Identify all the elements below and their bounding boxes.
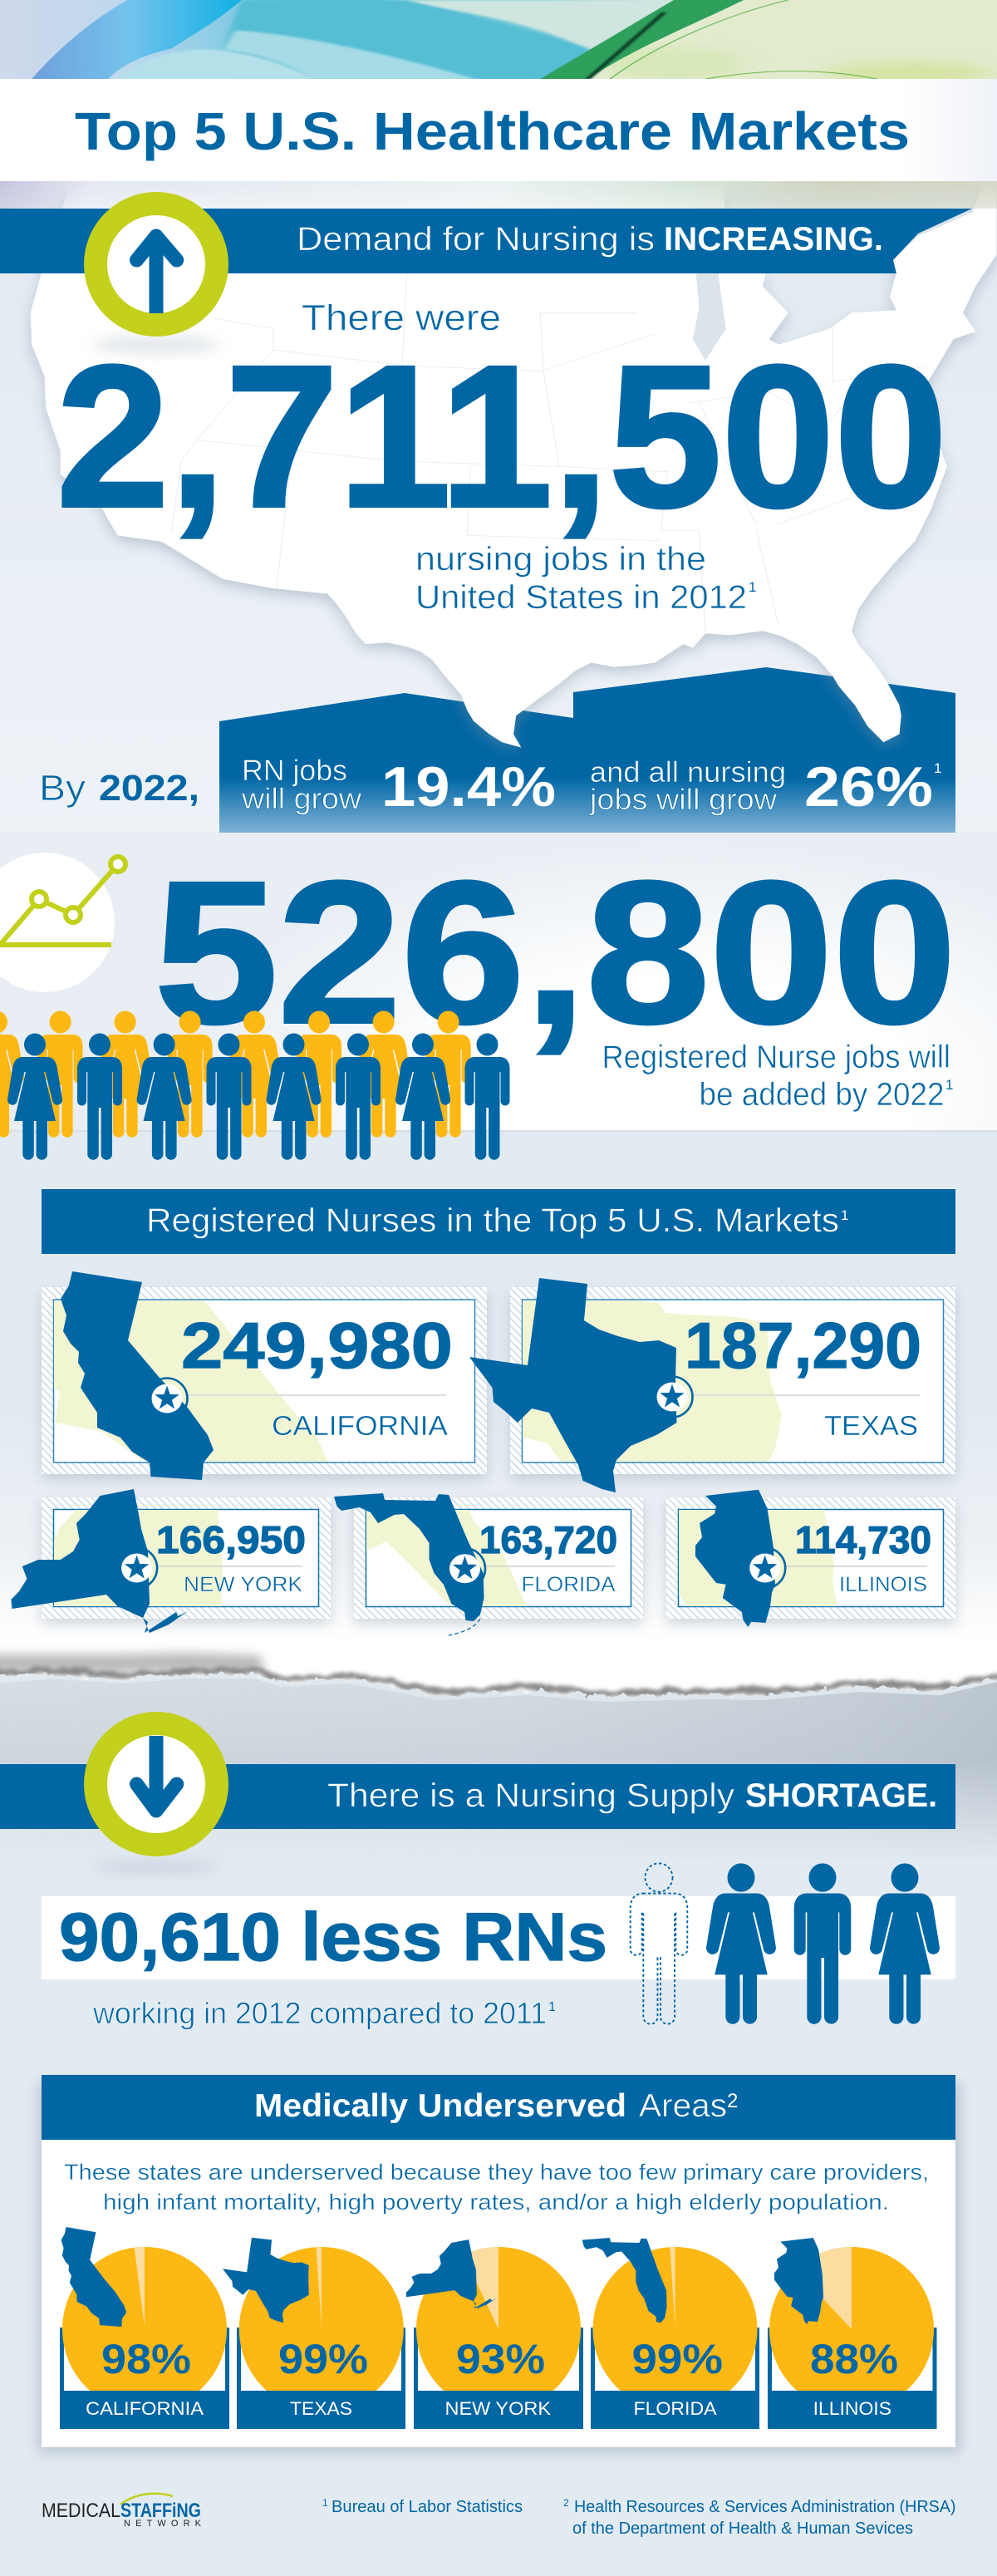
pie: California 98%: CALIFORNIA <box>86 2398 204 2419</box>
pie: New York 93%: 93% <box>456 2336 545 2382</box>
panel: New York <box>11 1489 331 1633</box>
pie: Illinois 88%: ILLINOIS <box>813 2398 891 2419</box>
decorative wave banner <box>0 0 997 86</box>
big stat: 2,711,500: 2,711,500 <box>56 324 947 549</box>
state: California <box>61 1271 214 1480</box>
heading: demand increasing: Demand for Nursing is <box>297 221 655 258</box>
state name: ILLINOIS <box>839 1573 927 1596</box>
big stat: 526,800: 526,800 <box>155 840 956 1065</box>
star badge <box>651 1376 693 1418</box>
text: by 2022: By <box>39 768 86 809</box>
panel header <box>42 2075 955 2140</box>
icon: up arrow badge <box>91 204 221 355</box>
text: by 2022: 2022, <box>99 768 199 809</box>
description <box>64 2160 929 2215</box>
value: 163,720 <box>479 1518 617 1561</box>
panel: California <box>42 1271 487 1480</box>
reflection below title band <box>0 181 997 209</box>
text: nursing jobs in the United States: 1 <box>749 579 756 595</box>
text: all nursing jobs will grow 26% <box>589 755 941 819</box>
value: 166,950 <box>156 1518 306 1561</box>
text: nursing jobs in the United States: United States in 2012 <box>415 579 747 616</box>
text: RN jobs will grow 19.4%: 19.4% <box>381 755 556 819</box>
heading band: registered nurses in top 5 markets <box>42 1189 955 1254</box>
value: 187,290 <box>685 1309 921 1382</box>
text: by 2022 <box>39 768 199 809</box>
heading: demand increasing <box>297 221 883 258</box>
text: nursing jobs in the United States: nursing jobs in the <box>415 541 706 578</box>
logo: Medical Staffing Network: MEDICAL <box>42 2500 120 2522</box>
description: These states are underserved because they have too few primary care providers, <box>64 2160 929 2185</box>
white strip: 90,610 less RNs <box>42 1896 955 1979</box>
panel: medically underserved areas <box>38 2075 960 2453</box>
figure: missing nurse outline <box>631 1863 687 2024</box>
pie: Illinois 88%: 88% <box>810 2336 898 2382</box>
growth box: all nursing jobs <box>573 667 955 833</box>
star badge <box>744 1547 785 1589</box>
logo: Medical Staffing Network: NETWORK <box>124 2519 202 2529</box>
title: Top 5 U.S. Healthcare Markets <box>75 101 910 161</box>
pie: New York 93% <box>406 2239 583 2429</box>
footnote: Bureau of Labor Statistics: 1 <box>322 2497 328 2509</box>
star badge <box>444 1548 485 1589</box>
figures: remaining nurses <box>706 1863 940 2024</box>
text: RN jobs added by 2022: be added by 2022 <box>700 1077 944 1113</box>
logo: Medical Staffing Network: STAFFiNG <box>120 2500 201 2522</box>
text: RN jobs added by 2022: 1 <box>945 1077 953 1093</box>
text: all nursing jobs will grow 26%: 26% <box>804 755 933 819</box>
text: RN jobs will grow 19.4%: RN jobs <box>242 755 347 787</box>
map: United States outline <box>31 151 997 753</box>
panel: Texas <box>469 1278 955 1492</box>
pie: California 98% <box>60 2227 229 2429</box>
value: 249,980 <box>181 1309 453 1382</box>
heading: shortage: There is a Nursing Supply <box>327 1777 734 1814</box>
title band <box>0 79 997 181</box>
star badge <box>116 1547 157 1589</box>
heading: demand increasing: INCREASING. <box>664 221 883 258</box>
text: all nursing jobs will grow 26%: and all nursing <box>590 756 786 789</box>
panel header: 2 <box>727 2090 738 2112</box>
heading band: registered nurses in top 5 markets: Registered Nurses in the Top 5 U.S. Markets <box>146 1202 839 1239</box>
description: high infant mortality, high poverty rates, and/or a high elderly population. <box>103 2190 889 2215</box>
people row: yellow figures <box>0 1010 471 1138</box>
value: 114,730 <box>795 1518 931 1561</box>
text: RN jobs will grow 19.4% <box>241 755 556 819</box>
text: all nursing jobs will grow 26%: 1 <box>934 760 941 776</box>
heading: shortage <box>327 1777 937 1814</box>
state: Texas <box>469 1278 676 1492</box>
torn paper divider <box>0 1662 997 1870</box>
state name: NEW YORK <box>184 1573 302 1596</box>
footnote: HRSA: of the Department of Health & Human Sevices <box>572 2519 913 2538</box>
text: working in 2012 compared to 2011: 1 <box>548 2000 556 2014</box>
header band: supply shortage <box>0 1764 955 1829</box>
state: Illinois <box>695 1490 775 1627</box>
star badge <box>146 1378 188 1419</box>
state name: TEXAS <box>824 1410 918 1441</box>
white strip: 90,610 less RNs: 90,610 less RNs <box>59 1900 607 1975</box>
text: RN jobs will grow 19.4%: will grow <box>241 783 362 815</box>
text: nursing jobs in the United States <box>415 541 756 616</box>
panel header: Medically Underserved <box>254 2088 626 2124</box>
panel: Illinois <box>666 1490 955 1627</box>
logo: Medical Staffing Network <box>42 2494 202 2529</box>
footnote: HRSA <box>563 2497 955 2538</box>
text: RN jobs added by 2022 <box>602 1040 953 1113</box>
pie: California 98%: 98% <box>101 2336 191 2382</box>
text: working in 2012 compared to 2011: working in 2012 compared to 2011 <box>92 1996 547 2030</box>
header band: demand for nursing <box>0 209 972 273</box>
state: New York <box>11 1489 188 1633</box>
heading: shortage: SHORTAGE. <box>745 1777 937 1814</box>
pie: New York 93%: NEW YORK <box>445 2398 551 2419</box>
pie: Florida 99% <box>582 2238 759 2429</box>
text: there were: There were <box>302 297 501 338</box>
panel: Florida <box>334 1493 643 1635</box>
growth box: RN jobs <box>219 693 573 833</box>
icon: growth line chart <box>0 853 125 992</box>
text: RN jobs added by 2022: Registered Nurse jobs will <box>602 1040 950 1075</box>
icon: down arrow badge <box>91 1723 221 1875</box>
pie: Illinois 88% <box>768 2238 937 2429</box>
people row: blue figures <box>7 1034 510 1160</box>
pie: Texas 99%: 99% <box>278 2336 368 2382</box>
footnote: HRSA: Health Resources & Services Administration (HRSA) <box>574 2498 955 2516</box>
pie: Florida 99%: 99% <box>631 2336 723 2382</box>
panel header: Areas <box>639 2088 727 2124</box>
footnote: Bureau of Labor Statistics: Bureau of Labor Statistics <box>332 2498 523 2516</box>
state name: CALIFORNIA <box>272 1410 448 1441</box>
state name: FLORIDA <box>522 1573 616 1596</box>
text: all nursing jobs will grow 26%: jobs will grow <box>589 784 778 816</box>
state: Florida <box>334 1493 484 1635</box>
pie: Texas 99% <box>223 2238 405 2429</box>
heading band: registered nurses in top 5 markets: 1 <box>841 1207 848 1223</box>
footnote: HRSA: 2 <box>563 2497 569 2509</box>
pie: Florida 99%: FLORIDA <box>633 2398 717 2419</box>
pie: Texas 99%: TEXAS <box>290 2398 352 2419</box>
